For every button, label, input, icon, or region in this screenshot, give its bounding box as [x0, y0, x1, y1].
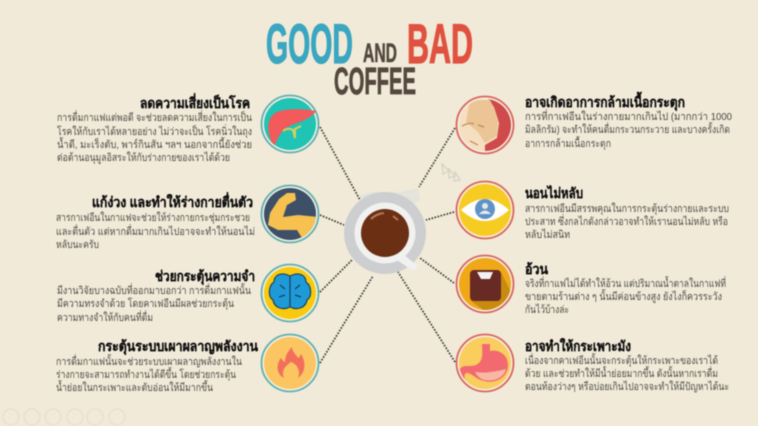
panel: weight gain: [456, 256, 726, 316]
panel: reduce disease risk: [57, 93, 318, 164]
title: COFFEE: [334, 61, 416, 103]
body text: เนื่องจากคาเฟอีนนั้นจะกระตุ้นให้กระเพาะของเราได้: [525, 353, 718, 367]
body text: กันไว้บ้างล่ะ: [525, 303, 569, 316]
body text: ความทางจำให้กับคนที่ดื่ม: [57, 310, 153, 324]
icon: stomach: [456, 334, 514, 392]
heading: นอนไม่หลับ: [525, 184, 583, 201]
body text: [525, 202, 729, 241]
body text: [57, 283, 251, 324]
heading: อาจเกิดอาการกล้ามเนื้อกระตุก: [525, 91, 685, 111]
title: GOOD: [266, 12, 353, 75]
body text: [525, 276, 726, 316]
presentation toolbar: [3, 409, 125, 425]
panel: muscle twitch: [456, 91, 732, 155]
body text: [56, 354, 242, 394]
dotted connectors: [320, 127, 455, 363]
title: [266, 12, 473, 103]
icon: liver: [262, 96, 318, 152]
icon: muscle: [456, 96, 515, 155]
panel: metabolism: [56, 334, 318, 394]
panel: insomnia: [456, 182, 729, 241]
heading: แก้ง่วง และทำให้ร่างกายตื่นตัว: [92, 192, 253, 210]
icon: brain: [262, 264, 318, 322]
body text: น้ำดี, มะเร็งตับ, พาร์กินสัน ฯลฯ นอกจากนี้ยังช่วย: [57, 137, 252, 151]
body text: [525, 109, 732, 150]
body text: การดื่มกาแฟนั้นจะช่วยระบบเผาผลาญพลังงานใน: [56, 354, 242, 368]
body text: มีงานวิจัยบางฉบับที่ออกมาบอกว่า การดื่มกาแฟนั้น: [57, 283, 251, 297]
icon: eye: [456, 182, 514, 238]
body text: ร่างกายจะสามารถทำงานได้ดีขึ้น โดยช่วยกระตุ้น: [56, 367, 236, 381]
body text: การดื่มกาแฟแต่พอดี จะช่วยลดความเสี่ยงในการเป็น: [57, 110, 252, 124]
heading: ลดความเสี่ยงเป็นโรค: [140, 93, 250, 111]
body text: โรคให้กับเราได้หลายอย่าง ไม่ว่าจะเป็น โรคนิ่วในถุง: [57, 124, 252, 138]
body text: หลับนะครับ: [56, 239, 99, 251]
panel: hangover and alertness: [56, 186, 318, 251]
body text: น้ำย่อยในกระเพาะและตับอ่อนให้มีมากขึ้น: [56, 380, 213, 394]
body text: หลับไม่สนิท: [525, 228, 570, 241]
body text: อาการกล้ามเนื้อกระตุก: [525, 136, 611, 150]
title: AND: [363, 38, 397, 68]
body text: [56, 211, 255, 251]
faint cursor marks: [442, 164, 460, 181]
body text: [525, 353, 729, 393]
panel: memory: [57, 264, 318, 324]
title: BAD: [407, 12, 473, 75]
body text: มีความทรงจำด้วย โดยคาเฟอีนมีผลช่วยกระตุ้น: [57, 297, 234, 310]
icon: flame: [262, 334, 318, 392]
body text: ด้วย และช่วยทำให้มีน้ำย่อยมากขึ้น ดังนั้นหากเราดื่ม: [525, 366, 718, 380]
heading: กระตุ้นระบบเผาผลาญพลังงาน: [98, 338, 258, 355]
heading: อาจทำให้กระเพาะมัง: [525, 337, 631, 354]
body text: การที่กาเฟอีนในร่างกายมากเกินไป (มากกว่า 1000: [525, 109, 732, 123]
heading: ช่วยกระตุ้นความจำ: [155, 268, 255, 285]
panel: gastric irritation: [456, 334, 729, 393]
icon: bathroom scale: [456, 256, 515, 315]
body text: [57, 110, 252, 164]
central coffee cup: [344, 188, 426, 274]
body text: สารกาเฟอีนในกาแฟจะช่วยให้ร่างกายกระชุ่มกระชวย: [56, 211, 250, 224]
body text: และตื่นตัว แต่หากดื่มมากเกินไปอาจจะทำให้นอนไม่: [56, 224, 255, 238]
body text: ขายตามร้านต่าง ๆ นั้นมีค่อนข้างสูง ยังไงก็ควรระวัง: [525, 289, 722, 303]
icon: flexed arm: [262, 186, 318, 242]
body text: ต่อต้านอนุมูลอิสระให้กับร่างกายของเราได้ด้วย: [57, 151, 230, 164]
heading: อ้วน: [525, 261, 548, 277]
